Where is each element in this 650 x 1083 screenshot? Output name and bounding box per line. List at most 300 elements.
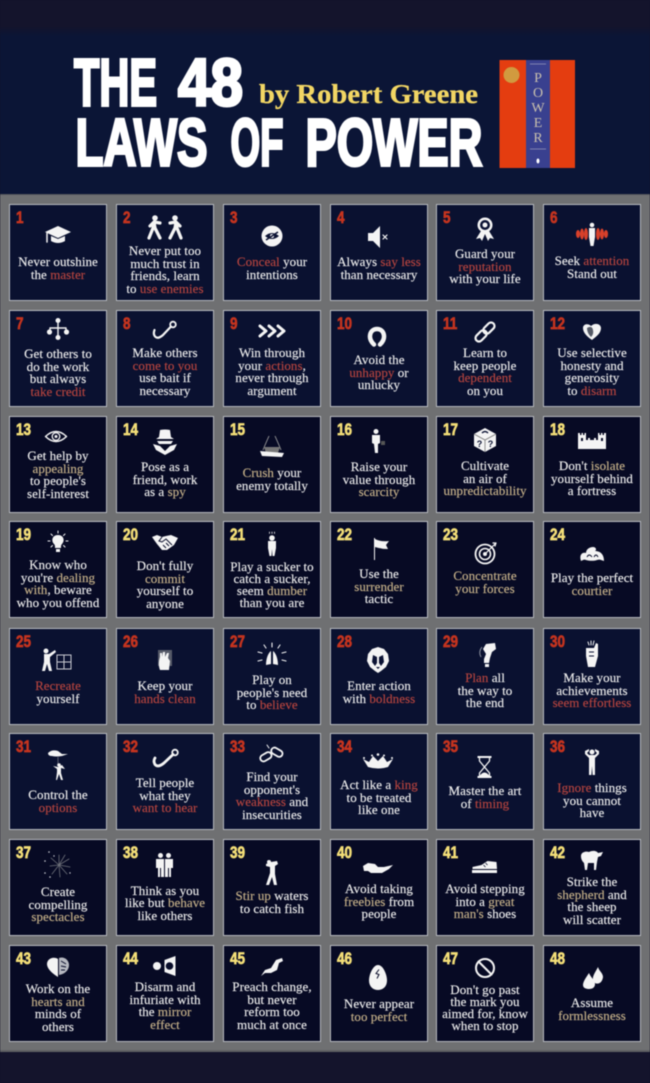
law text: effect [150,1016,180,1032]
icon: sheep [581,850,603,870]
card: law 23 [436,521,534,618]
law number: 35 [443,738,458,756]
law text: hands clean [134,690,196,706]
law text: but never [247,992,297,1006]
law text: Stir up waters [236,888,308,903]
icon: mirror [153,956,176,976]
title line: LAWS OF POWER: OF [230,106,284,180]
law text [556,345,628,398]
law text [342,459,416,500]
law number: 32 [123,738,138,756]
law text: necessary [140,382,190,398]
law text: on you [467,382,503,398]
icon: hand with pattern [157,650,173,670]
law text [330,998,428,1023]
law text [543,572,641,597]
law text: Use selective [557,345,627,360]
law text: want to hear [133,800,197,815]
card: law 45 [223,945,321,1042]
icon: standing person [371,428,386,454]
law text: to use enemies [126,280,204,296]
law number: 24 [550,526,565,544]
title line: THE 48: THE [74,46,157,120]
card: law 27 [223,628,321,725]
law number: 17 [443,421,458,439]
law text: Make your [563,670,621,685]
law text: friend, work [133,472,197,486]
law number: 7 [16,315,24,333]
law text: an air of [463,470,507,486]
card: law 30 [543,628,641,725]
law text [9,680,107,705]
law number: 29 [443,633,458,651]
card: law 1 [9,204,107,301]
law text: Preach change, [232,979,312,994]
icon: white flag [373,538,389,560]
law text: unlucky [358,377,400,392]
icon: jester hat [579,547,605,561]
icon: open hand [363,863,393,873]
law text: Create [41,884,75,899]
card: law 48 [543,945,641,1042]
law text: Ignore things [557,780,627,795]
card: law 25 [9,628,107,725]
law number: 34 [337,738,352,756]
law text: into a great [455,894,515,908]
law number: 5 [443,209,451,227]
law number: 14 [123,421,138,439]
title line: LAWS OF POWER [76,106,482,180]
card: law 26 [116,628,214,725]
law text: insecurities [242,806,302,822]
law number: 20 [123,526,138,544]
card: law 13 [9,416,107,513]
icon: hourglass [477,756,492,778]
law text: like one [358,802,400,817]
law text: seem dumber [237,583,307,598]
card: law 31 [9,733,107,830]
law text: Don't go past [450,982,520,997]
law text: Find your [246,769,298,784]
card: law 40 [330,839,428,936]
icon: award rosette [476,216,494,242]
icon: water drops [583,967,603,989]
law number: 48 [550,950,565,968]
law text: the master [31,266,85,282]
law text: generosity [565,370,619,385]
icon: figure among crowd [575,222,609,247]
law number: 6 [550,209,558,227]
icon: man stirring [266,859,278,885]
icon: muted speaker [367,226,388,248]
icon: chain links [474,320,496,344]
law text [550,458,634,498]
card: law 36 [543,733,641,830]
icon: mystery dice: ? [488,439,493,449]
law number: 47 [443,950,458,968]
icon: balance network [46,317,70,341]
law text: use bait if [139,370,191,385]
icon: hand gesture [586,641,598,667]
law text: to be treated [347,790,411,804]
card: law 38 [116,839,214,936]
icon: handshake [152,534,178,551]
law text: with boldness [343,690,415,706]
card: law 20 [116,521,214,618]
icon: praying hands [257,643,287,667]
icon: cracked egg [369,965,387,990]
law text [330,680,428,705]
law number: 23 [443,526,458,544]
law text: will scatter [563,912,621,926]
icon: lion head [367,647,389,673]
icon: fish hook [152,320,178,340]
law text: than you are [240,595,304,610]
law text: Stand out [567,266,617,280]
card: law 35 [436,733,534,830]
law text: never through [235,370,309,385]
icon: fireworks [43,851,71,879]
law text: but always [30,371,86,386]
law text: a fortress [568,483,616,498]
card: law 18 [543,416,641,513]
law text [336,254,422,282]
law number: 43 [16,950,31,968]
law text: Conceal your [237,254,307,269]
law text: like but behave [125,895,205,910]
card: law 10 [330,310,428,407]
card: law 24 [543,521,641,618]
icon: light bulb [46,530,69,553]
law text: minds of [35,1006,81,1021]
law text: unhappy or [349,364,409,380]
law text: of timing [461,796,509,810]
law text: scarcity [359,484,399,499]
law text: commit [145,570,185,586]
law text [436,672,534,710]
card: law 39 [223,839,321,936]
law text: hearts and [31,994,85,1008]
law number: 4 [337,209,345,227]
law text: Master the art [449,783,521,798]
law text: your actions, [238,358,306,372]
law text: self-interest [27,486,89,500]
panel: laws grid [0,194,650,1052]
law text: Win through [239,345,305,360]
law text: much at once [237,1016,307,1032]
card: law 8 [116,310,214,407]
law text: aimed for, know [442,1006,528,1021]
icon: book cover: P [534,71,542,86]
law text: Learn to [463,345,507,360]
law text: Control the [28,787,88,802]
law text [116,885,214,922]
law number: 1 [16,209,24,227]
law number: 33 [230,738,245,756]
icon: book cover [500,60,575,168]
card: law 41 [436,839,534,936]
law number: 10 [337,315,352,333]
law text: to catch fish [240,900,304,916]
card: law 19 [9,521,107,618]
law text: yourself [36,690,80,706]
law text: Avoid taking [345,881,413,896]
law text [448,246,522,286]
law text: much trust in [130,256,200,270]
law text: Seek attention [555,253,629,268]
card: law 17 [436,416,534,513]
law text: Get others to [24,346,92,361]
law text: like others [137,908,193,923]
law number: 36 [550,738,565,756]
law text [443,458,527,498]
law text: do the work [27,358,89,374]
law number: 38 [123,844,138,862]
icon: man hands on head [585,749,599,775]
law number: 12 [550,315,565,333]
law text [330,568,428,606]
law text: who you offend [17,594,99,610]
law text [330,779,428,816]
law text: Enter action [347,678,411,693]
card: law 6 [543,204,641,301]
law text [223,981,321,1031]
law text [9,886,107,924]
icon: puzzled person [267,532,277,556]
law number: 42 [550,844,565,862]
law text: what they [139,788,191,802]
icon: crown [363,753,393,769]
icon: horseshoe [366,326,388,348]
law text: yourself behind [551,470,633,486]
icon: triple chevrons [258,324,286,338]
law text: Plan all [465,670,505,685]
law number: 16 [337,421,352,439]
law text [26,448,90,500]
law number: 27 [230,633,245,651]
law text: spectacles [31,909,85,924]
law text: to disarm [567,382,617,398]
icon: broken chain [260,745,284,763]
law text: courtier [572,582,612,598]
law text [9,983,107,1033]
card: law 3 [223,204,321,301]
law text: catch a sucker, [233,571,311,586]
law text: when to stop [451,1018,519,1033]
law text: honesty and [560,358,624,372]
law text: compelling [28,896,88,912]
icon: mystery dice: ? [477,439,482,449]
law number: 22 [337,526,352,544]
law text: Pose as a [141,459,189,474]
law text [330,883,428,920]
law text: Think as you [131,883,199,898]
icon: heart and brain [46,957,70,977]
law text [543,876,641,926]
law text: value through [343,472,415,486]
law text [116,981,214,1031]
law number: 15 [230,421,245,439]
law text [126,243,204,296]
law text [436,785,534,810]
law text: Never put too [129,243,201,258]
law text [132,459,198,500]
law text: Play the perfect [551,570,633,585]
law text: Recreate [35,678,81,693]
title line: LAWS OF POWER: POWER [306,106,482,180]
law text: freebies from [344,894,414,908]
title line: THE 48: 48 [178,46,243,120]
law text: people's need [237,684,307,700]
icon: two men [156,853,173,877]
icon: mystery dice [473,427,497,452]
law number: 41 [443,844,458,862]
law text: Never outshine [18,254,98,269]
law number: 30 [550,633,565,651]
law text: Use the [359,566,399,581]
law text: to believe [246,697,298,712]
law text: come to you [133,358,197,372]
card: law 14 [116,416,214,513]
law text: appealing [32,460,83,476]
law text: Act like a king [340,777,418,792]
law text: Disarm and [135,979,195,994]
law text: Assume [571,995,613,1010]
law text: formlessness [558,1008,626,1022]
law text: reputation [458,258,512,274]
law text: Crush your [243,465,301,480]
icon: puppeteer and puppet [48,749,68,781]
law text: Avoid the [353,352,405,367]
law text [223,890,321,915]
card: law 29 [436,628,534,725]
law text [543,782,641,820]
icon: book cover: O [533,86,543,101]
law text: Raise your [351,459,407,474]
law text: you're dealing [21,570,95,584]
law text [236,465,308,494]
law text: Keep your [138,678,192,693]
header band [0,0,650,194]
icon: concealed eye [260,224,284,248]
card: law 5 [436,204,534,301]
law number: 40 [337,844,352,862]
icon: eye [44,430,68,443]
law text: seem effortless [553,695,631,710]
law text: anyone [146,596,184,610]
law text [18,254,98,282]
icon: no entry sign [475,958,495,978]
card: law 15 [223,416,321,513]
law text: Strike the [567,874,617,889]
law text: unpredictability [443,483,527,498]
law text [223,674,321,712]
law number: 26 [123,633,138,651]
law text: as a spy [144,484,186,499]
card: law 33 [223,733,321,830]
card: law 2 [116,204,214,301]
law text: dependent [458,370,512,385]
card: law 43 [9,945,107,1042]
law text: keep people [454,358,516,372]
law text: Tell people [136,775,194,790]
card: law 12 [543,310,641,407]
law number: 37 [16,844,31,862]
icon: spy [152,428,178,456]
law number: 8 [123,315,131,333]
law text: opponent's [244,782,300,796]
law text [132,345,198,398]
icon: boxers [146,214,184,240]
icon: chandelier [260,436,284,458]
law text: people [362,906,396,921]
law text: intentions [246,266,298,282]
law text: infuriate with [129,992,201,1006]
law text: Know who [29,557,87,572]
law text: Never appear [344,996,414,1011]
card: law 32 [116,733,214,830]
law text: man's shoes [454,906,516,921]
law number: 11 [443,315,457,333]
card: law 11 [436,310,534,407]
law text [543,672,641,710]
law number: 9 [230,315,238,333]
law text [16,557,100,610]
law text: to people's [30,473,86,488]
law text [223,561,321,609]
law text: achievements [556,682,628,698]
law text [9,789,107,814]
law text [116,777,214,814]
law number: 45 [230,950,245,968]
title [72,46,576,180]
law text [436,570,534,595]
law text: than necessary [341,266,417,282]
card: law 21 [223,521,321,618]
law text: the sheep [567,899,617,914]
law text [436,883,534,920]
law text: reform too [244,1004,300,1019]
card: law 9 [223,310,321,407]
law text: Guard your [455,246,515,261]
law number: 21 [230,526,245,544]
law text: Play on [252,672,292,687]
law text: options [39,800,77,814]
law text: Don't fully [137,558,193,573]
law text: yourself to [137,583,193,598]
law text [543,997,641,1022]
law text: with your life [449,271,521,286]
law number: 19 [16,526,31,544]
law text: Concentrate [453,568,517,583]
law text: Play a sucker to [230,559,314,574]
subtitle: by Robert Greene: by Robert Greene [259,78,478,109]
icon: book cover: E [534,116,542,131]
law text: with, beware [24,582,92,597]
law text: Avoid stepping [445,881,525,896]
law number: 28 [337,633,352,651]
law text [235,345,309,398]
icon: graduation cap [44,225,72,244]
law number: 25 [16,633,31,651]
law text: weakness and [236,794,308,809]
law text: friends, learn [130,268,200,283]
law text: others [42,1018,74,1034]
law text: the way to [458,682,512,698]
law text: Always say less [337,254,421,269]
law text: Cultivate [461,458,509,473]
law text: the mirror [139,1004,191,1019]
